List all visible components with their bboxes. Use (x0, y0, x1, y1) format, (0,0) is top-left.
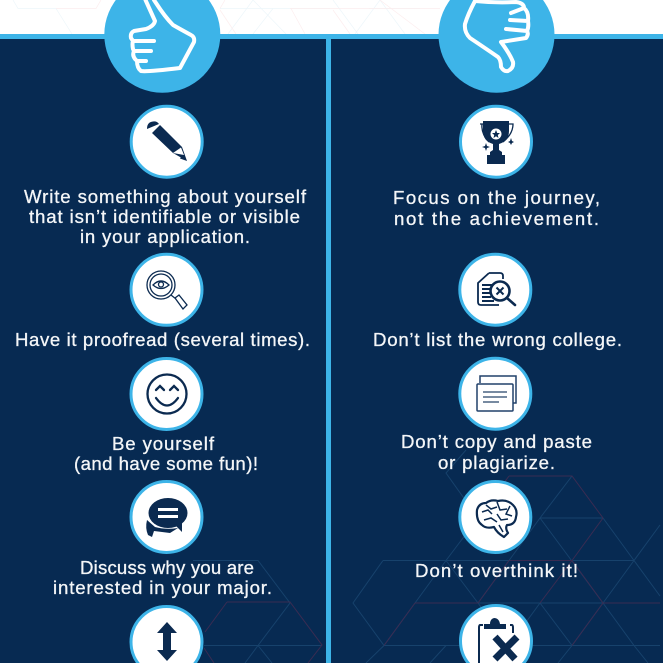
text: discuss (53, 557, 272, 598)
text: discuss: Discuss why you are (80, 557, 254, 578)
text: be yourself: (and have some fun)! (74, 453, 258, 474)
text: be yourself: Be yourself (112, 433, 215, 454)
text: wrong college: Don’t list the wrong college. (373, 329, 622, 350)
icon: up-down arrow (131, 606, 202, 663)
text: focus on the journey: not the achievement. (394, 208, 599, 229)
icon: magnifier (131, 254, 202, 325)
text: focus on the journey (393, 187, 600, 229)
icon: speech bubbles (131, 482, 202, 552)
icon: pencil (131, 106, 202, 177)
text: write something: Write something about yourself (24, 186, 307, 207)
text: focus on the journey: Focus on the journey, (393, 187, 600, 208)
icon: document with magnifier (460, 254, 531, 325)
text: overthink: Don’t overthink it! (415, 560, 578, 581)
icon: smiley (131, 358, 202, 430)
text: write something: in your application. (80, 226, 250, 247)
icon: overlapping cards (460, 358, 531, 429)
text: discuss: interested in your major. (53, 577, 272, 598)
icon: clipboard with x (460, 606, 532, 663)
divider (326, 34, 331, 663)
text: write something (24, 186, 307, 247)
icon: trophy (460, 106, 532, 177)
panel: don'ts (373, 106, 622, 663)
icon: thumbs up (104, 0, 220, 93)
text: copy and paste (401, 431, 592, 473)
text: be yourself (74, 433, 258, 474)
panel: do's (15, 106, 310, 663)
background lattice (193, 450, 660, 663)
text: proofread: Have it proofread (several times). (15, 329, 310, 350)
icon: thumbs down (438, 0, 554, 93)
text: copy and paste: or plagiarize. (438, 452, 555, 473)
icon: brain (460, 482, 531, 552)
text: copy and paste: Don’t copy and paste (401, 431, 592, 452)
text: write something: that isn’t identifiable or visible (29, 206, 300, 227)
